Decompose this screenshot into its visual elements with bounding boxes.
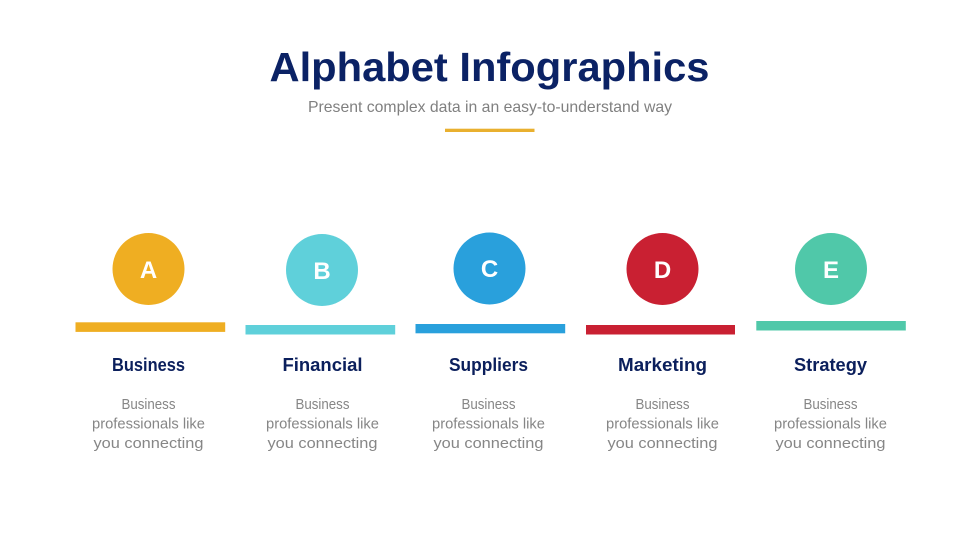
heading: Strategy: Strategy <box>794 355 867 375</box>
title: Alphabet Infographics <box>270 44 710 90</box>
text block: Suppliers: professionals like <box>432 416 545 432</box>
text block: Financial: you connecting <box>268 436 378 452</box>
heading: Financial: Financial <box>282 355 362 375</box>
bar: Marketing <box>586 325 735 334</box>
text block: Marketing: professionals like <box>606 416 719 432</box>
heading: Marketing: Marketing <box>618 355 707 375</box>
heading: Business: Business <box>112 355 185 375</box>
icon: circle A: A <box>140 257 157 284</box>
text block: Business: Business <box>122 397 176 413</box>
panel: D Marketing <box>586 233 735 452</box>
bar: Strategy <box>756 321 906 330</box>
bar: Business <box>76 322 225 332</box>
text block: Business: professionals like <box>92 416 205 432</box>
icon: circle E: E <box>823 257 839 284</box>
text block: Strategy <box>774 397 887 452</box>
text block: Marketing: Business <box>636 397 690 413</box>
subtitle: Present complex data in an easy-to-understand way <box>308 99 672 116</box>
icon: circle B: B <box>313 258 331 285</box>
icon: circle C: C <box>481 256 498 283</box>
text block: Suppliers: you connecting <box>434 436 544 452</box>
icon: circle E <box>795 233 867 305</box>
icon: circle D <box>626 233 698 305</box>
panel: C Suppliers <box>416 232 565 452</box>
heading: Suppliers: Suppliers <box>449 355 528 375</box>
text block: Strategy: Business <box>804 397 858 413</box>
icon: circle C <box>454 232 526 304</box>
text block: Suppliers: Business <box>462 397 516 413</box>
panel: B Financial <box>246 234 395 452</box>
text block: Marketing <box>606 397 719 452</box>
panel: E Strategy <box>756 233 906 452</box>
icon: circle D: D <box>654 257 671 284</box>
text block: Financial <box>266 397 379 452</box>
panel: A Business <box>76 233 225 452</box>
text block: Strategy: professionals like <box>774 416 887 432</box>
icon: circle B <box>286 234 358 306</box>
text block: Suppliers <box>432 397 545 452</box>
text block: Business <box>92 397 205 452</box>
text block: Financial: Business <box>296 397 350 413</box>
text block: Strategy: you connecting <box>776 436 886 452</box>
text block: Business: you connecting <box>94 436 204 452</box>
icon: circle A <box>112 233 184 305</box>
bar: Financial <box>246 325 395 334</box>
text block: Financial: professionals like <box>266 416 379 432</box>
title underline <box>445 129 534 132</box>
bar: Suppliers <box>416 324 565 333</box>
text block: Marketing: you connecting <box>608 436 718 452</box>
